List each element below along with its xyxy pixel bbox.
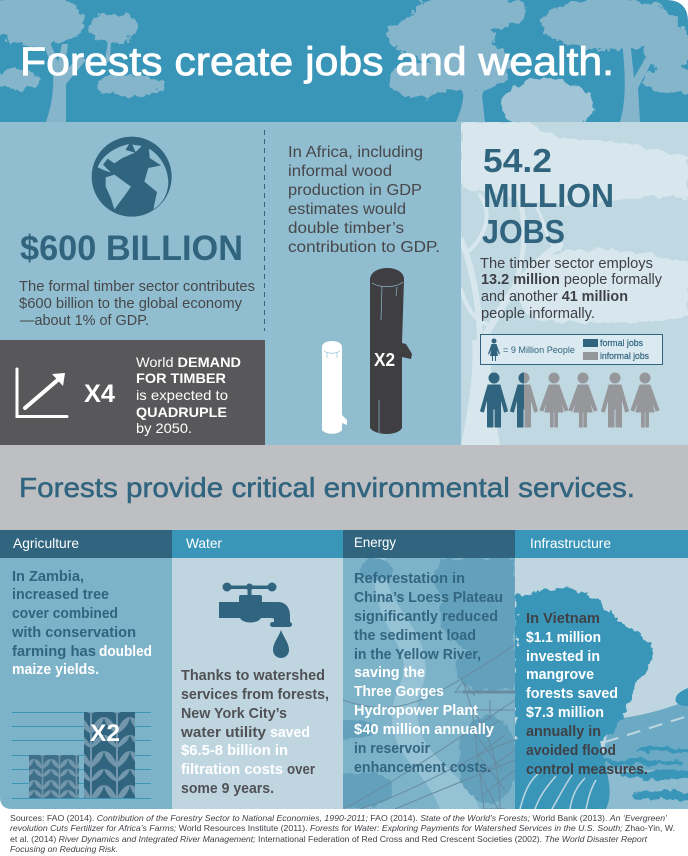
panel: Africa GDP xyxy=(288,144,440,434)
text: Africa: In Africa, including xyxy=(288,144,423,161)
text: Africa xyxy=(288,144,440,256)
text: Vietnam: annually in xyxy=(526,723,601,740)
heading: 54.2 million jobs: MILLION xyxy=(483,178,614,215)
text: New York City: over xyxy=(287,761,315,778)
text: timber employment: 13.2 million people formally xyxy=(481,272,663,288)
panel: section heading band xyxy=(0,445,688,530)
sources footnote: et al. (2014) River Dynamics and Integrated River Management; International Federation of Red Cross and Red Crescent Societies (2002). The World Disaster Report xyxy=(10,834,648,844)
icon: small white log xyxy=(322,341,347,434)
text: Vietnam: mangrove xyxy=(526,666,594,683)
text: Zambia xyxy=(11,568,152,678)
text: Loess Plateau: saving the xyxy=(354,664,425,681)
panel: infrastructure xyxy=(515,530,688,809)
text: formal timber sector: The formal timber sector contributes xyxy=(19,279,255,295)
heading: 54.2 million jobs: 54.2 xyxy=(483,143,552,180)
text: timber employment xyxy=(480,256,663,322)
text: New York City: filtration costs xyxy=(181,761,283,778)
icon: large dark log xyxy=(370,268,412,434)
text: Loess Plateau: Three Gorges xyxy=(354,683,444,700)
text: New York City: some 9 years. xyxy=(181,780,274,797)
text: Zambia: maize yields. xyxy=(12,661,99,678)
header title: Forests create jobs and wealth. xyxy=(20,40,614,84)
panel: 600 billion xyxy=(19,137,255,329)
label: X2 maize: X2 xyxy=(90,720,120,747)
label: X2: X2 xyxy=(374,350,395,370)
legend xyxy=(480,334,662,364)
text: Loess Plateau: $40 million annually xyxy=(354,721,495,738)
text: New York City xyxy=(180,667,329,797)
text: Loess Plateau: in reservoir xyxy=(354,740,430,757)
text: Vietnam: forests saved xyxy=(526,685,618,702)
text: Vietnam: control measures. xyxy=(526,761,648,778)
heading: environmental services: Forests provide critical environmental services. xyxy=(19,472,635,503)
text: formal timber sector: $600 billion to the global economy xyxy=(19,296,243,312)
text: demand quadruple xyxy=(136,354,241,436)
text: Africa: double timber’s xyxy=(288,220,404,237)
text: Loess Plateau: enhancement costs. xyxy=(354,759,491,776)
text: demand quadruple: World DEMAND xyxy=(136,354,241,370)
column heading: infrastructure: Infrastructure xyxy=(530,535,611,551)
text: demand quadruple: by 2050. xyxy=(136,420,192,436)
text: New York City: saved xyxy=(270,724,310,741)
text: Zambia: In Zambia, xyxy=(12,568,84,585)
text: New York City: services from forests, xyxy=(181,686,329,703)
sources footnote: Focusing on Reducing Risk. xyxy=(10,844,118,854)
text: formal timber sector: —about 1% of GDP. xyxy=(20,313,149,329)
text: Zambia: farming has xyxy=(12,643,96,660)
text: New York City: $6.5-8 billion in xyxy=(181,742,288,759)
panel: agriculture xyxy=(0,530,172,809)
label: X4: X4 xyxy=(84,380,115,408)
legend: formal jobs xyxy=(600,338,643,348)
text: Africa: contribution to GDP. xyxy=(288,239,440,256)
text: Loess Plateau: the sediment load xyxy=(354,627,476,644)
text: Loess Plateau: China’s Loess Plateau xyxy=(354,589,503,606)
text: Loess Plateau: Hydropower Plant xyxy=(354,702,478,719)
text: formal timber sector xyxy=(19,279,255,329)
text: Vietnam: $7.3 million xyxy=(526,704,604,721)
heading: 54.2 million jobs: JOBS xyxy=(482,214,565,251)
text: timber employment: people informally. xyxy=(481,306,595,322)
text: Africa: informal wood xyxy=(288,163,392,180)
text: Zambia: with conservation xyxy=(11,624,136,641)
text: Loess Plateau: in the Yellow River, xyxy=(354,646,481,663)
text: Vietnam xyxy=(526,610,648,778)
text: New York City: New York City’s xyxy=(181,705,287,722)
icon: legend person xyxy=(488,338,500,361)
icon: growth chart arrow xyxy=(17,369,67,416)
energy landscape backdrop xyxy=(343,558,515,809)
text: Zambia: cover combined xyxy=(12,605,118,622)
text: demand quadruple: is expected to xyxy=(136,387,228,403)
text: timber employment: and another 41 million xyxy=(481,289,628,305)
panel: timber economy background xyxy=(0,122,461,445)
text: Zambia: doubled xyxy=(99,643,152,660)
text: Loess Plateau xyxy=(354,570,503,776)
header tree silhouettes xyxy=(0,0,688,132)
text: Vietnam: avoided flood xyxy=(526,742,616,759)
column heading: energy: Energy xyxy=(354,534,396,550)
panel: demand for timber xyxy=(0,340,265,445)
icon: six people pictogram xyxy=(480,372,659,427)
text: timber employment: The timber sector employs xyxy=(480,256,653,272)
text: New York City: Thanks to watershed xyxy=(181,667,325,684)
chart: maize yield bars xyxy=(12,712,151,798)
icon: globe xyxy=(92,137,172,217)
panel: energy xyxy=(343,530,515,809)
text: New York City: water utility xyxy=(180,724,267,741)
text: Africa: estimates would xyxy=(288,201,406,218)
text: Vietnam: In Vietnam xyxy=(526,610,600,627)
icon: faucet and drop xyxy=(219,582,292,658)
text: Zambia: increased tree xyxy=(12,586,109,603)
mangrove and road backdrop xyxy=(515,587,688,809)
sources footnote: revolution Cuts Fertilizer for Africa’s Farms; World Resources Institute (2011). Forests for Water: Exploring Payments for Watershed Services in the U.S. South; Zhao-Yin, W. xyxy=(10,823,675,833)
text: Loess Plateau: significantly reduced xyxy=(354,608,498,625)
heading: 54.2 million jobs xyxy=(482,143,614,251)
text: demand quadruple: QUADRUPLE xyxy=(136,404,227,420)
text: demand quadruple: FOR TIMBER xyxy=(136,370,226,386)
panel: water xyxy=(172,530,343,809)
text: Loess Plateau: Reforestation in xyxy=(354,570,465,587)
text: Vietnam: $1.1 million xyxy=(526,629,601,646)
column heading: water: Water xyxy=(186,535,222,551)
text: Vietnam: invested in xyxy=(526,648,600,665)
tree backdrop xyxy=(461,122,688,445)
sources footnote: Sources: FAO (2014). Contribution of the Forestry Sector to National Economies, 1990-2011; FAO (2014). State of the World’s Forests; World Bank (2013). An ‘Evergreen’ xyxy=(10,813,667,823)
column heading: agriculture: Agriculture xyxy=(13,535,79,551)
legend: informal jobs xyxy=(600,351,649,361)
legend: = 9 Million People xyxy=(503,345,575,356)
text: Africa: production in GDP xyxy=(288,182,422,199)
header banner xyxy=(0,0,688,132)
panel: 54.2 million jobs xyxy=(461,122,688,445)
sources footnote xyxy=(10,813,675,854)
heading: 600 billion: $600 BILLION xyxy=(20,229,243,268)
